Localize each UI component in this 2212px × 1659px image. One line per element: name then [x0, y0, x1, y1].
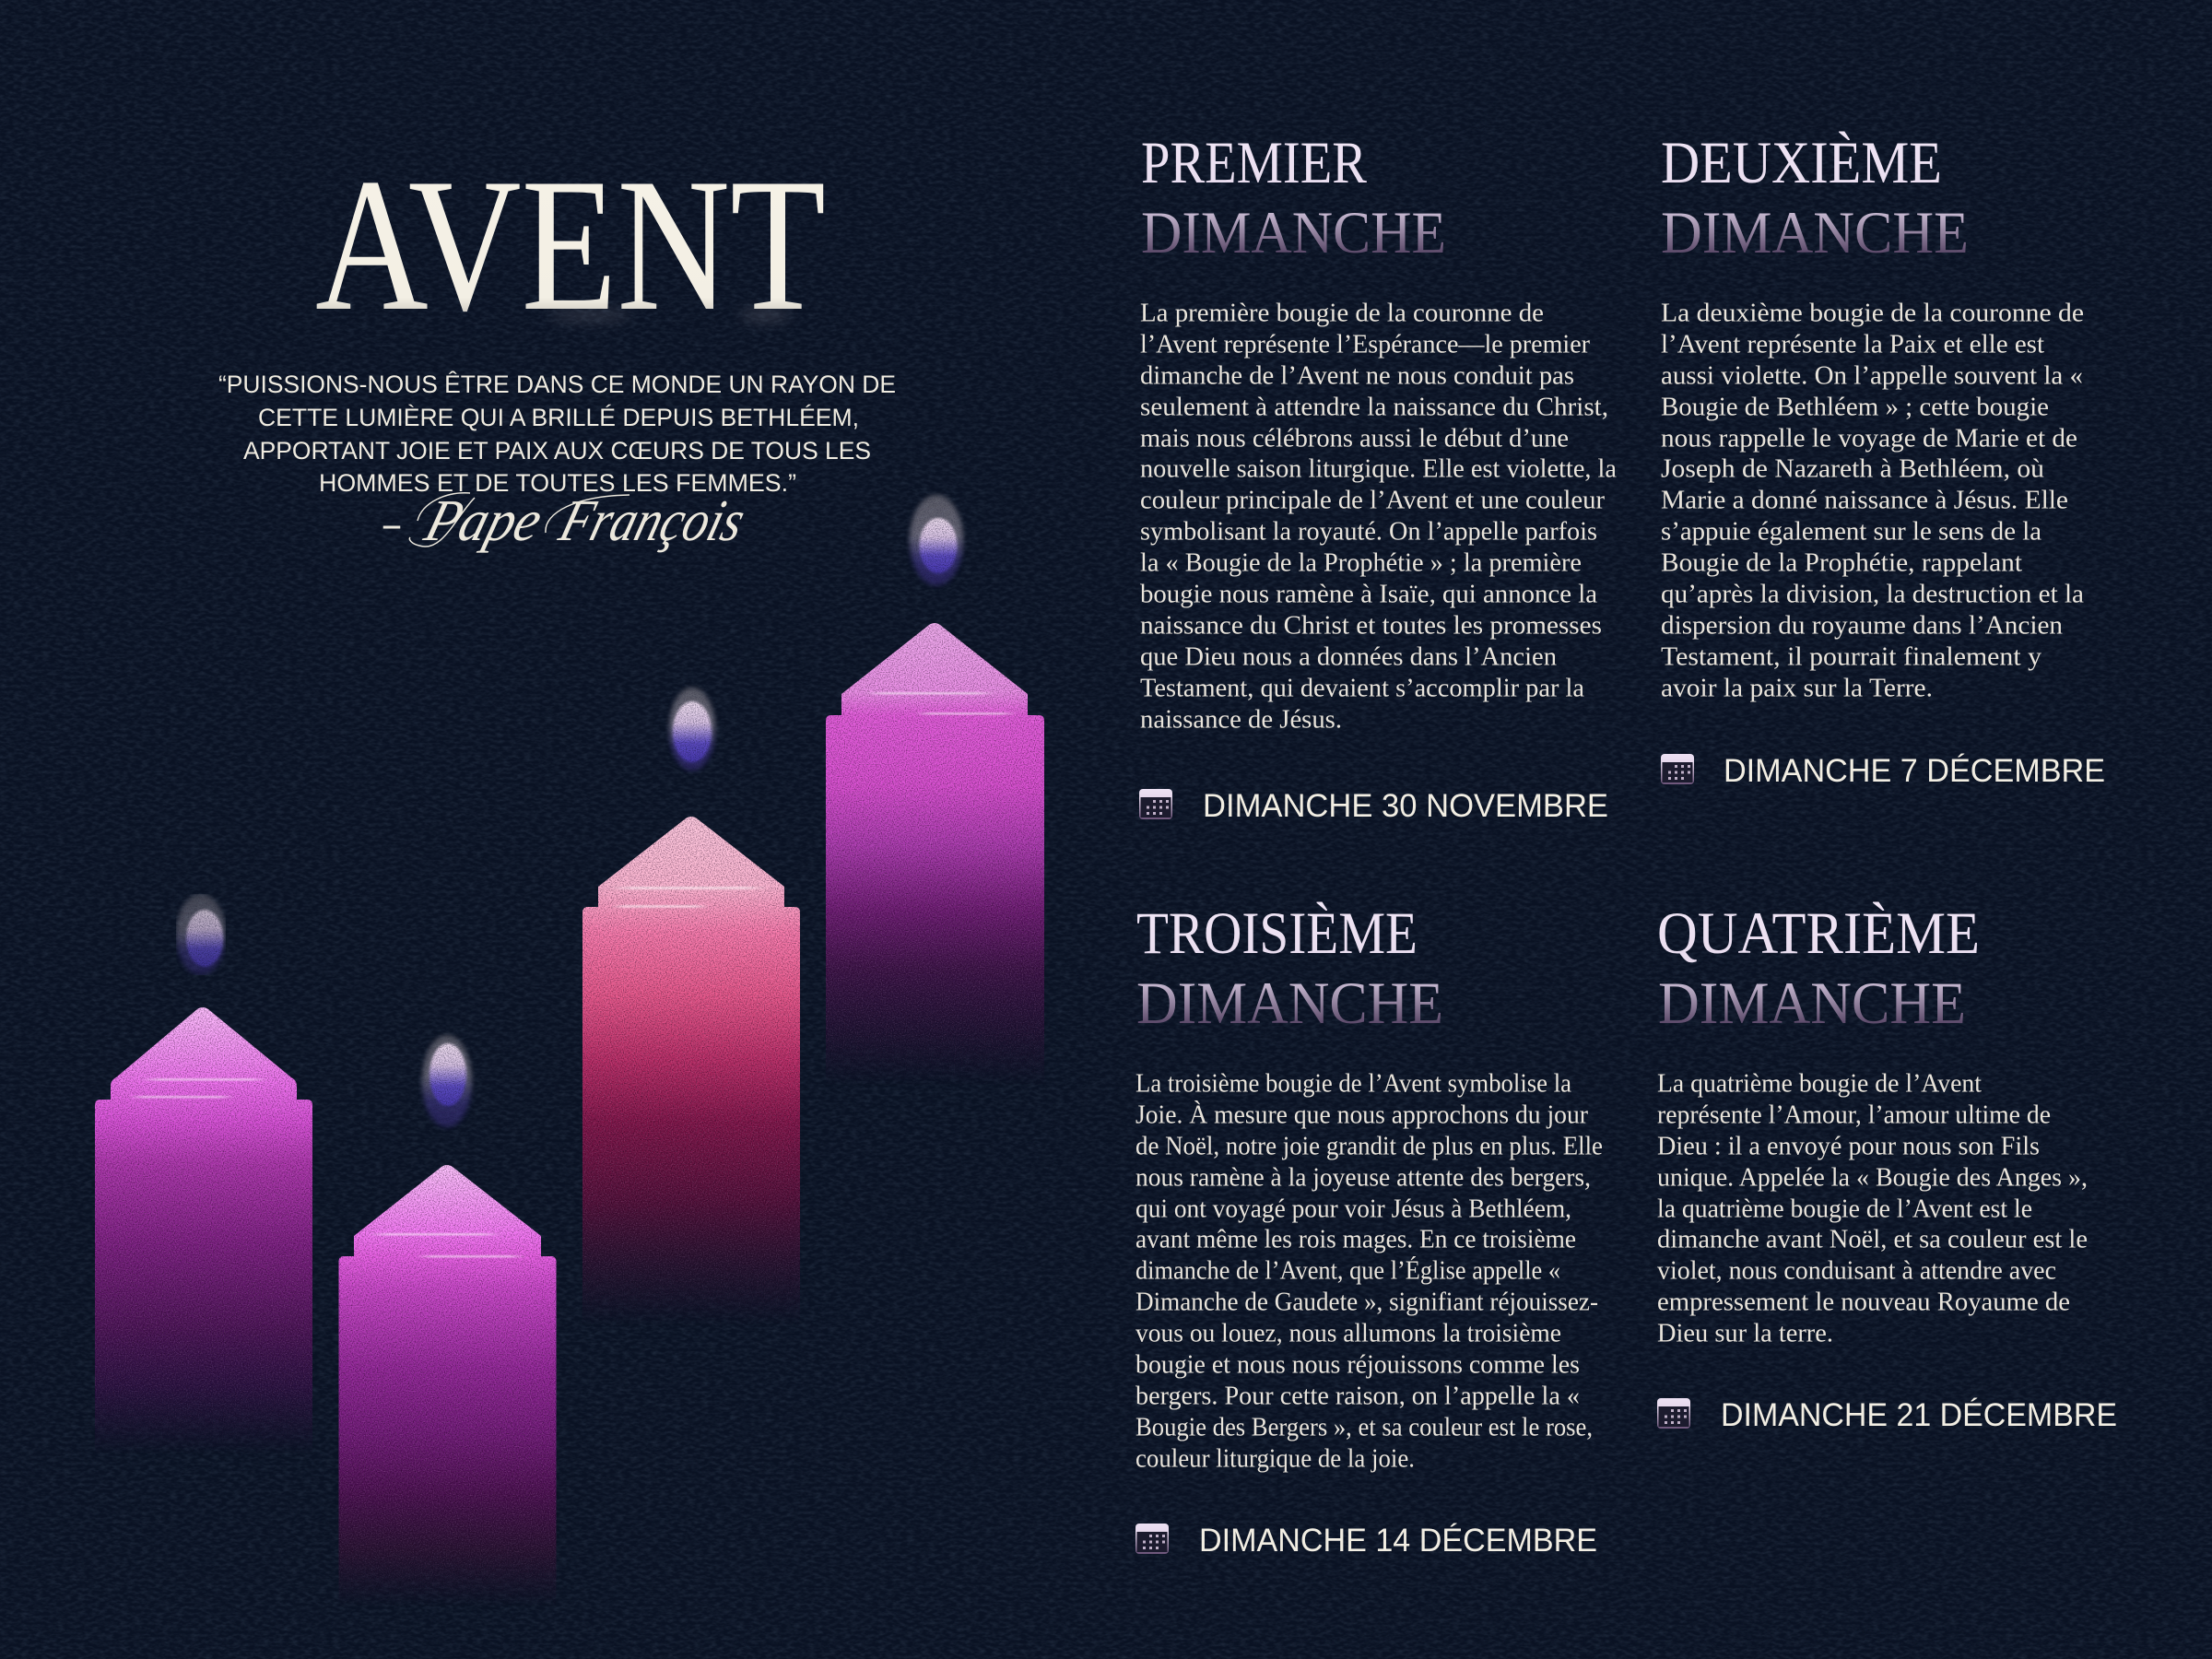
icon: calendar [1139, 789, 1172, 819]
body text: la « Bougie de la Prophétie » ; la première [1140, 549, 1582, 577]
icon: calendar [1661, 754, 1694, 784]
flame 4 [910, 495, 963, 585]
flame 1 [176, 894, 226, 975]
body text [1661, 299, 2085, 702]
body text: dimanche de l’Avent ne nous conduit pas [1140, 361, 1574, 391]
body text: dispersion du royaume dans l’Ancien [1661, 612, 2063, 640]
body text: aussi violette. On l’appelle souvent la « [1661, 361, 2083, 391]
heading [1657, 900, 1980, 1037]
panel: quatrième dimanche [1657, 900, 2117, 1433]
body text: bergers. Pour cette raison, on l’appelle la « [1135, 1382, 1580, 1410]
body text: Bougie des Bergers », et sa couleur est le rose, [1135, 1414, 1593, 1441]
body text: que Dieu nous a données dans l’Ancien [1140, 643, 1557, 671]
body text: couleur principale de l’Avent et une couleur [1140, 487, 1606, 514]
body text [1135, 1069, 1603, 1473]
panel: troisième dimanche [1135, 900, 1603, 1559]
body text: mais nous célébrons aussi le début d’une [1140, 424, 1569, 453]
body text: Joie. À mesure que nous approchons du jour [1135, 1100, 1589, 1130]
body text: Dieu sur la terre. [1657, 1320, 1833, 1347]
candle 1 [95, 1007, 312, 1493]
body text: seulement à attendre la naissance du Christ, [1140, 393, 1608, 422]
quote [218, 370, 896, 497]
body text: couleur liturgique de la joie. [1135, 1445, 1415, 1473]
body text: Dieu : il a envoyé pour nous son Fils [1657, 1132, 2040, 1161]
heading: DIMANCHE [1661, 200, 1969, 266]
icon: calendar [1657, 1398, 1690, 1429]
body text: symbolisant la royauté. On l’appelle parfois [1140, 518, 1597, 546]
date: DIMANCHE 30 NOVEMBRE [1203, 788, 1608, 824]
body text: unique. Appelée la « Bougie des Anges », [1657, 1163, 2088, 1193]
heading: DIMANCHE [1141, 200, 1446, 266]
body text: La deuxième bougie de la couronne de [1661, 299, 2084, 328]
body text: naissance du Christ et toutes les promesses [1140, 612, 1602, 640]
body text: dimanche de l’Avent, que l’Église appelle « [1135, 1257, 1560, 1285]
body text: avoir la paix sur la Terre. [1661, 675, 1933, 702]
quote: APPORTANT JOIE ET PAIX AUX CŒURS DE TOUS LES [243, 437, 871, 465]
date: DIMANCHE 21 DÉCEMBRE [1721, 1397, 2117, 1433]
body text: qu’après la division, la destruction et la [1661, 581, 2085, 608]
heading: QUATRIÈME [1657, 900, 1980, 967]
quote: CETTE LUMIÈRE QUI A BRILLÉ DEPUIS BETHLÉEM, [258, 404, 859, 431]
body text: de Noël, notre joie grandit de plus en plus. Elle [1135, 1132, 1603, 1161]
heading: DEUXIÈME [1661, 130, 1942, 196]
flame 3 [669, 688, 715, 771]
body text [1140, 299, 1618, 734]
illustration: candles [95, 495, 1044, 1650]
heading: PREMIER [1141, 130, 1368, 196]
heading [1141, 130, 1446, 266]
body text: bougie et nous nous réjouissons comme les [1135, 1351, 1580, 1379]
candle 2 [339, 1165, 557, 1650]
heading [1661, 130, 1969, 266]
body text: qui ont voyagé pour voir Jésus à Bethléem, [1135, 1194, 1571, 1224]
body text: la quatrième bougie de l’Avent est le [1657, 1194, 2032, 1224]
flame 2 [422, 1035, 472, 1127]
heading [1136, 900, 1443, 1037]
title: Avent: AVENT [315, 139, 826, 350]
body text: La quatrième bougie de l’Avent [1657, 1069, 1982, 1099]
signature: Pape François: Pape [418, 488, 549, 554]
body text: nous rappelle le voyage de Marie et de [1661, 424, 2077, 453]
body text: l’Avent représente l’Espérance—le premier [1140, 330, 1591, 359]
body text: Testament, qui devaient s’accomplir par la [1140, 675, 1585, 702]
body text: La troisième bougie de l’Avent symbolise la [1135, 1069, 1572, 1099]
body text: nous ramène à la joyeuse attente des bergers, [1135, 1163, 1591, 1193]
body text: nouvelle saison liturgique. Elle est violette, la [1140, 455, 1618, 483]
panel: deuxième dimanche [1661, 130, 2105, 789]
signature: Pape François [382, 488, 752, 554]
quote: “PUISSIONS-NOUS ÊTRE DANS CE MONDE UN RAYON DE [218, 370, 896, 398]
signature: Pape François: – [382, 491, 401, 552]
body text: l’Avent représente la Paix et elle est [1661, 330, 2044, 359]
body text: La première bougie de la couronne de [1140, 299, 1544, 328]
body text [1657, 1069, 2088, 1347]
date: DIMANCHE 7 DÉCEMBRE [1724, 753, 2105, 789]
heading: TROISIÈME [1136, 900, 1418, 967]
candle 4 [826, 623, 1044, 1106]
body text: avant même les rois mages. En ce troisième [1135, 1226, 1576, 1253]
panel: premier dimanche [1139, 130, 1618, 824]
body text: dimanche avant Noël, et sa couleur est le [1657, 1226, 2088, 1253]
body text: Dimanche de Gaudete », signifiant réjouissez- [1135, 1288, 1598, 1316]
date: DIMANCHE 14 DÉCEMBRE [1199, 1523, 1597, 1559]
body text: naissance de Jésus. [1140, 706, 1342, 734]
body text: vous ou louez, nous allumons la troisième [1135, 1320, 1561, 1347]
heading: DIMANCHE [1658, 971, 1966, 1037]
body text: s’appuie également sur le sens de la [1661, 518, 2042, 546]
body text: Marie a donné naissance à Jésus. Elle [1661, 487, 2068, 514]
body text: représente l’Amour, l’amour ultime de [1657, 1100, 2051, 1130]
body text: bougie nous ramène à Isaïe, qui annonce la [1140, 581, 1598, 608]
body text: empressement le nouveau Royaume de [1657, 1288, 2070, 1316]
candle 3 [582, 817, 800, 1336]
signature: Pape François: François [552, 488, 752, 554]
body text: Testament, il pourrait finalement y [1661, 643, 2041, 671]
body text: Bougie de la Prophétie, rappelant [1661, 549, 2022, 577]
body text: Bougie de Bethléem » ; cette bougie [1661, 393, 2049, 422]
quote: HOMMES ET DE TOUTES LES FEMMES.” [319, 469, 796, 497]
body text: violet, nous conduisant à attendre avec [1657, 1257, 2056, 1285]
body text: Joseph de Nazareth à Bethléem, où [1661, 455, 2044, 483]
heading: DIMANCHE [1136, 971, 1443, 1037]
icon: calendar [1135, 1524, 1169, 1554]
